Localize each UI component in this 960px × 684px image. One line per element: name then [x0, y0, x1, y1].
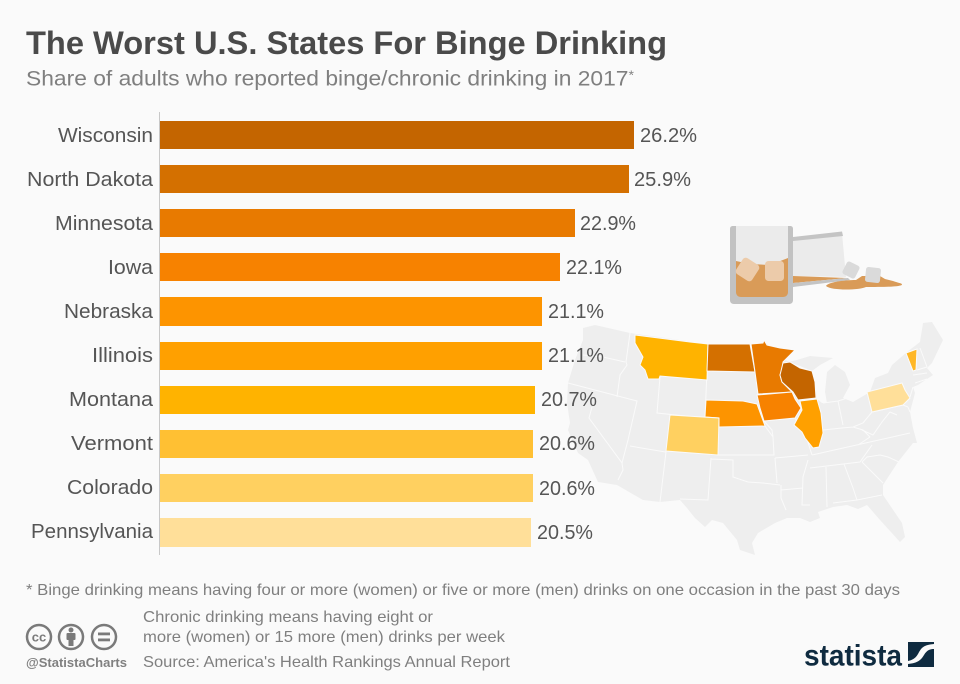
- row: Illinois: [92, 342, 604, 370]
- row: Montana: 20.7%: [541, 389, 597, 411]
- spilled puddle: [826, 276, 902, 290]
- note: chronic drinking: more (women) or 15 more (men) drinks per week: [143, 629, 506, 646]
- row: Wisconsin: 26.2%: [640, 125, 697, 147]
- note: chronic drinking: Chronic drinking means having eight or: [143, 609, 434, 626]
- map: upper Michigan: [788, 356, 833, 371]
- footnote: * Binge drinking means having four or more (women) or five or more (men) drinks on one occasion in the past 30 days: [26, 582, 900, 599]
- map: Wisconsin: [780, 362, 816, 400]
- map: Vermont: [906, 349, 917, 371]
- row: Wisconsin: [58, 121, 697, 149]
- ice cube: [734, 256, 761, 283]
- icon: no derivatives: [92, 625, 116, 649]
- map: Iowa: [757, 392, 801, 421]
- row: Illinois: 21.1%: [548, 345, 604, 367]
- icon: cc: cc: [32, 630, 46, 644]
- source: Source: America's Health Rankings Annual Report: [143, 654, 511, 671]
- row: Minnesota: 22.9%: [580, 213, 636, 235]
- bar chart: [27, 112, 697, 555]
- row: North Dakota: North Dakota: [27, 169, 154, 191]
- icons: creative commons licence: [27, 625, 116, 649]
- upright glass: [730, 226, 793, 304]
- row: Vermont: [71, 430, 595, 458]
- row: Montana: Montana: [69, 389, 154, 411]
- map: state borders: [568, 333, 927, 510]
- icon: spilled whiskey glasses: [730, 226, 902, 304]
- map: Montana: [635, 335, 708, 380]
- row: Colorado: 20.6%: [539, 478, 595, 500]
- logo: statista: statista: [804, 640, 903, 672]
- icon: attribution: [59, 625, 83, 649]
- row: Illinois: Illinois: [92, 345, 153, 367]
- row: North Dakota: [27, 165, 691, 193]
- title: The Worst U.S. States For Binge Drinking: [26, 25, 667, 61]
- handle: @StatistaCharts: [26, 656, 127, 670]
- row: Minnesota: Minnesota: [55, 213, 154, 235]
- ice cube: [765, 261, 784, 281]
- row: Colorado: [67, 474, 595, 502]
- map: Nebraska: [705, 400, 765, 427]
- row: Iowa: 22.1%: [566, 257, 622, 279]
- row: Vermont: Vermont: [71, 433, 153, 455]
- row: Colorado: Colorado: [67, 477, 153, 499]
- map of the United States: [567, 322, 943, 555]
- row: Nebraska: Nebraska: [64, 301, 154, 323]
- row: Nebraska: [64, 297, 604, 326]
- subtitle: *: [628, 68, 634, 82]
- note: chronic drinking: [143, 609, 506, 646]
- ice cube: [842, 261, 860, 279]
- row: Wisconsin: Wisconsin: [58, 125, 153, 147]
- row: Pennsylvania: 20.5%: [537, 522, 593, 544]
- map: Illinois: [794, 399, 823, 448]
- row: Pennsylvania: [31, 518, 593, 547]
- tipped glass: [793, 233, 846, 277]
- row: Minnesota: [55, 209, 636, 237]
- map: North Dakota: [707, 344, 755, 372]
- subtitle: Share of adults who reported binge/chronic drinking in 2017: [26, 68, 581, 90]
- ice cube: [865, 267, 881, 283]
- row: Iowa: Iowa: [108, 257, 154, 279]
- row: Nebraska: 21.1%: [548, 301, 604, 323]
- map: Pennsylvania: [867, 383, 910, 412]
- row: Vermont: 20.6%: [539, 433, 595, 455]
- map: Colorado: [666, 415, 719, 455]
- row: North Dakota: 25.9%: [634, 169, 691, 191]
- map: Minnesota: [751, 340, 795, 394]
- map: land base: [567, 322, 943, 555]
- row: Montana: [69, 386, 597, 414]
- icon: statista mark: [908, 642, 934, 667]
- row: Pennsylvania: Pennsylvania: [31, 521, 154, 543]
- row: Iowa: [108, 253, 622, 281]
